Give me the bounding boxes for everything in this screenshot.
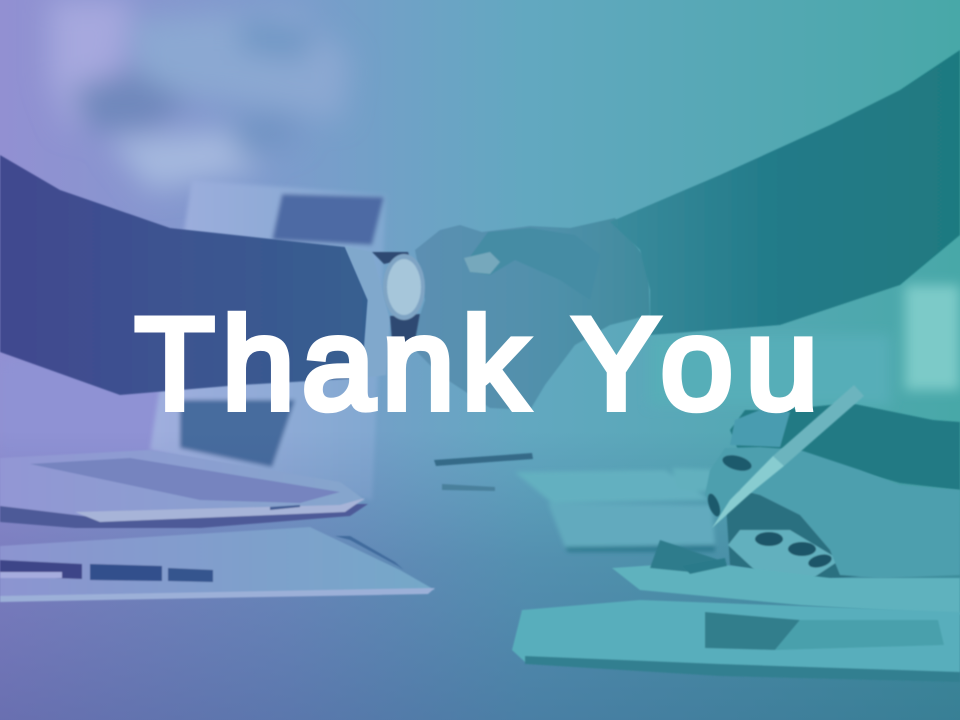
papers on the table [515, 468, 730, 552]
shirt cuff [345, 246, 390, 378]
clasped hands [410, 218, 650, 410]
laptop screen [150, 180, 386, 500]
table shading [0, 430, 960, 720]
right suit sleeve [610, 50, 960, 335]
clip and documents lower right [612, 540, 960, 615]
pens on the table [434, 453, 533, 491]
document and pen on the left [0, 527, 435, 602]
title: You [573, 290, 818, 436]
tablet lower right [512, 600, 960, 682]
writing hand [705, 447, 960, 580]
blurred right background panel [650, 285, 960, 405]
blurred background figure [50, 0, 350, 190]
title: Thank [135, 290, 528, 436]
left suit sleeve [0, 155, 368, 395]
laptop base [0, 450, 368, 528]
silver pen in hand [712, 385, 864, 528]
right dark sleeve above writing hand [730, 403, 960, 490]
wristwatch [372, 252, 425, 345]
blurred area under left sleeve [0, 360, 170, 460]
title [135, 290, 818, 436]
